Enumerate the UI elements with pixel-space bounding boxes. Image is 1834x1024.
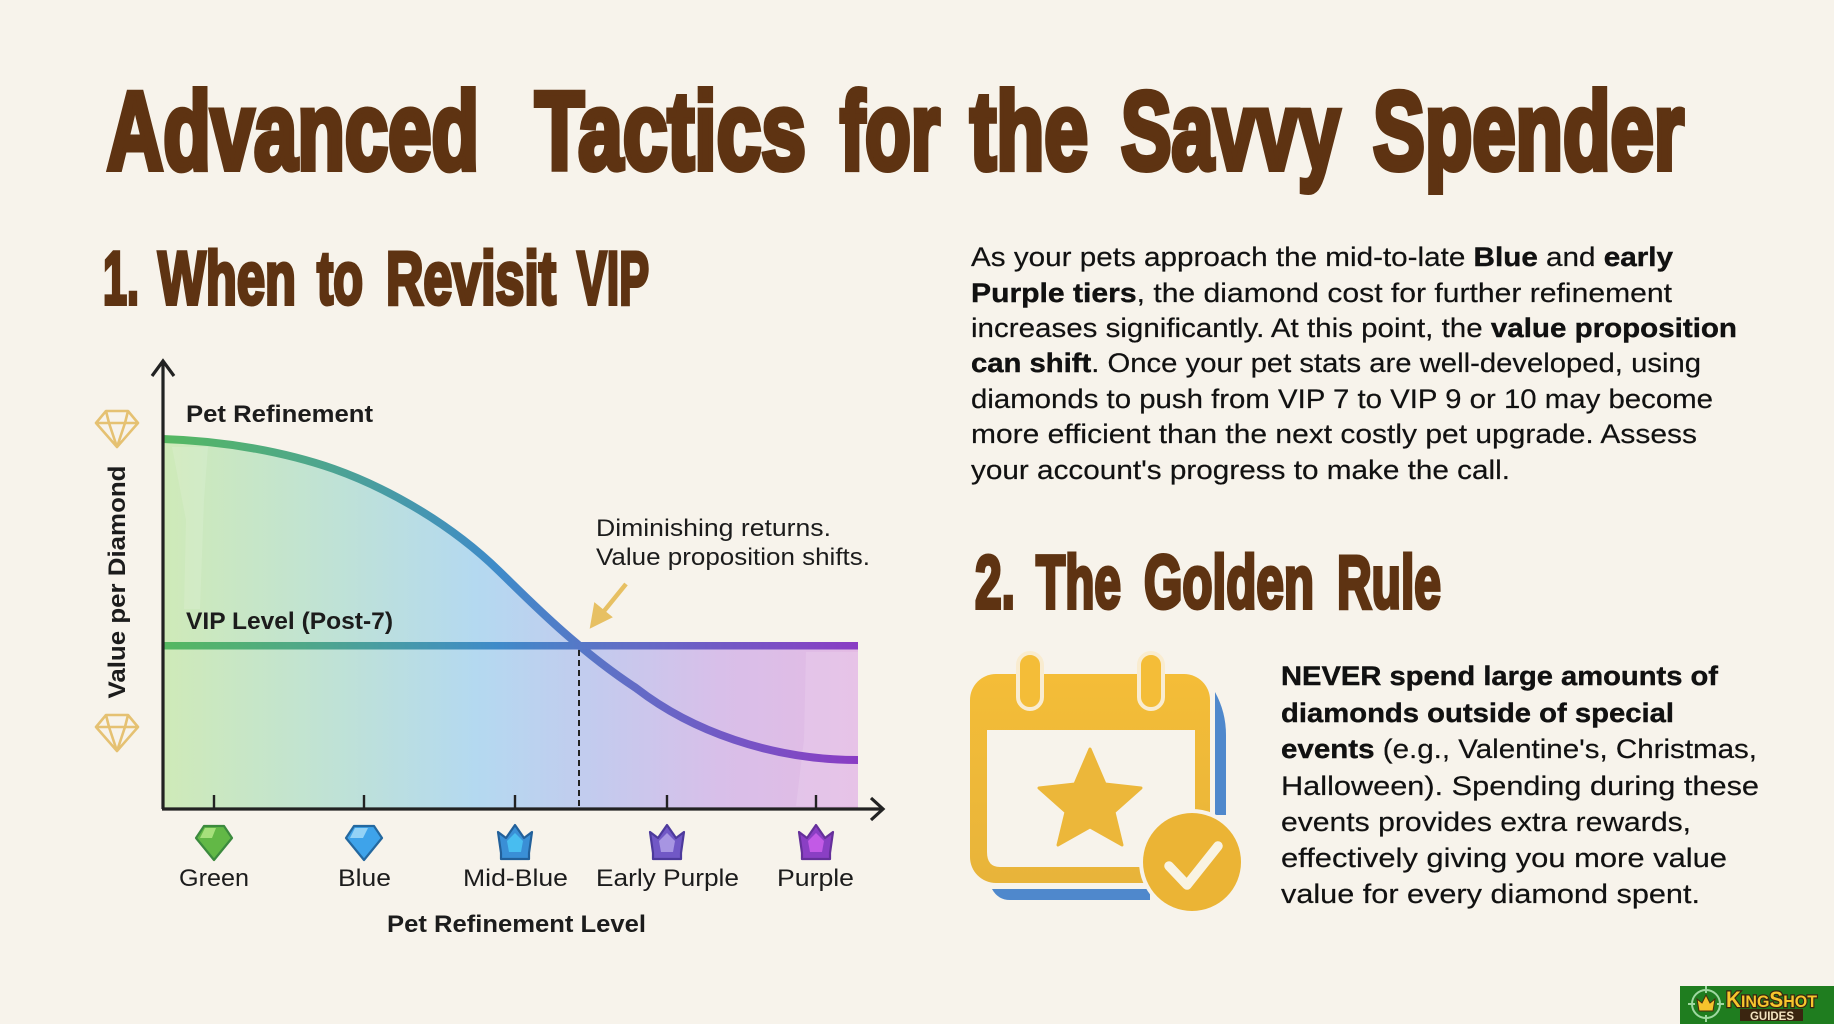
heading: section 1: Revisit [386,236,556,320]
curve: pet refinement [163,439,858,760]
text block: when to revisit VIP: Purple tiers , the diamond cost for further refinement [971,278,1673,308]
tier: green [179,826,249,892]
badge: KingShot Guides: KINGSHOT [1726,987,1818,1012]
heading: section 2: The [1036,540,1121,624]
crossover dashed line [578,650,580,809]
badge: KingShot Guides: GUIDES [1750,1009,1794,1023]
tier: purple [777,825,854,892]
callout: diminishing returns: Diminishing returns. [596,515,831,542]
heading: section 1: When [158,236,296,320]
tier: early purple: Early Purple [596,865,739,892]
text block: the golden rule: NEVER spend large amounts of [1281,661,1719,691]
title [107,70,1684,193]
text block: when to revisit VIP: more efficient than the next costly pet upgrade. Assess [971,419,1697,449]
tier: blue: Blue [338,865,391,892]
text block: when to revisit VIP: your account's progress to make the call. [971,455,1510,485]
text block: when to revisit VIP [971,242,1737,485]
faint texture patches [172,447,858,806]
icon: gold diamond top [96,411,138,447]
icon: calendar with star and check [970,653,1245,915]
chart: value per diamond [96,361,883,938]
text block: the golden rule: value for every diamond spent. [1281,879,1700,909]
tier: early purple [596,825,739,892]
label: VIP level: VIP Level (Post-7) [186,608,393,635]
text block: when to revisit VIP: diamonds to push from VIP 7 to VIP 9 or 10 may become [971,384,1713,414]
tier: mid-blue [463,825,568,892]
tier: green: Green [179,865,249,892]
text block: when to revisit VIP: increases significantly. At this point, the value proposition [971,313,1737,343]
text block: the golden rule [1281,661,1759,909]
text block: the golden rule: events provides extra rewards, [1281,807,1691,837]
heading: section 1 [103,236,649,320]
y axis label: Value per Diamond [104,466,131,698]
text block: the golden rule: Halloween). Spending during these [1281,771,1759,801]
label: pet refinement: Pet Refinement [186,401,373,428]
arrow: callout pointer [591,584,626,627]
heading: section 2: Golden [1144,540,1314,624]
text block: the golden rule: effectively giving you more value [1281,843,1727,873]
callout: diminishing returns [596,515,870,571]
text block: the golden rule: diamonds outside of special [1281,698,1674,728]
text block: the golden rule: events (e.g., Valentine's, Christmas, [1281,734,1757,764]
callout: diminishing returns: Value proposition shifts. [596,544,870,571]
heading: section 2 [975,540,1441,624]
chart area fill [163,439,858,809]
axes [152,361,883,820]
title: Savvy [1121,70,1340,193]
title: Spender [1373,70,1684,193]
x axis label: Pet Refinement Level [387,911,646,938]
badge: KingShot Guides [1680,986,1834,1024]
title: Tactics [535,70,806,193]
title: Advanced [107,70,479,193]
heading: section 1: VIP [577,236,649,320]
title: the [970,70,1088,193]
tier: mid-blue: Mid-Blue [463,865,568,892]
title: for [840,70,940,193]
tier: blue [338,826,391,892]
heading: section 2: Rule [1337,540,1441,624]
heading: section 2: 2. [975,540,1015,624]
heading: section 1: to [317,236,363,320]
text block: when to revisit VIP: can shift . Once your pet stats are well-developed, using [971,348,1701,378]
text block: when to revisit VIP: As your pets approach the mid-to-late Blue and early [971,242,1673,272]
heading: section 1: 1. [103,236,139,320]
line: VIP level [163,642,858,650]
tier: purple: Purple [777,865,854,892]
icon: gold diamond bottom [96,715,138,751]
